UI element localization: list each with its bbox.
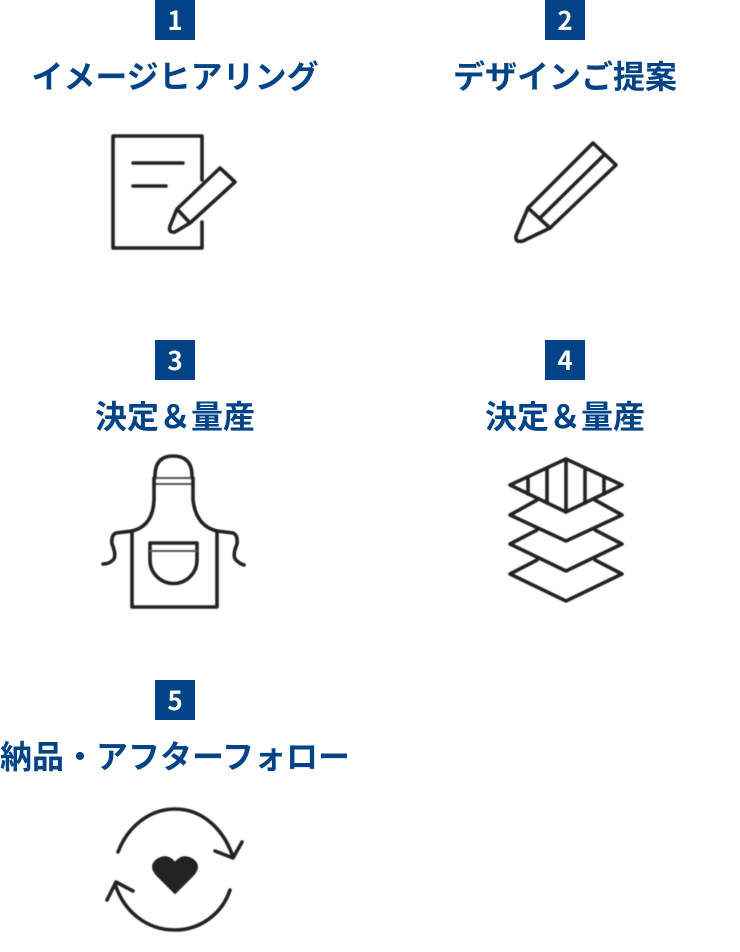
step 2 title: デザインご提案 <box>453 52 677 98</box>
step 2 heading <box>453 0 677 98</box>
step 4 title: 決定＆量産 <box>485 392 645 438</box>
icon: stacked fabric layers <box>510 459 622 601</box>
step 1 number badge: 1 <box>167 1 183 38</box>
step 2 number badge: 2 <box>557 1 573 38</box>
icon: document with pen <box>113 136 235 248</box>
step 4 number badge: 4 <box>557 341 573 378</box>
step 5 title: 納品・アフターフォロー <box>0 732 350 778</box>
step 3 number badge: 3 <box>167 341 183 378</box>
step 2 number badge <box>545 0 585 40</box>
step 1 heading <box>31 0 319 98</box>
step 4 heading <box>485 340 645 438</box>
step 1 number badge <box>155 0 195 40</box>
step 5 heading <box>0 680 350 778</box>
step 4 number badge <box>545 340 585 380</box>
step 3 number badge <box>155 340 195 380</box>
step 3 title: 決定＆量産 <box>95 392 255 438</box>
step 5 number badge: 5 <box>167 681 183 718</box>
icon: apron <box>103 456 244 607</box>
icon: pencil <box>516 143 616 241</box>
icon: circular arrows with heart <box>107 809 242 930</box>
step 5 number badge <box>155 680 195 720</box>
step 1 title: イメージヒアリング <box>31 52 319 98</box>
step 3 heading <box>95 340 255 438</box>
